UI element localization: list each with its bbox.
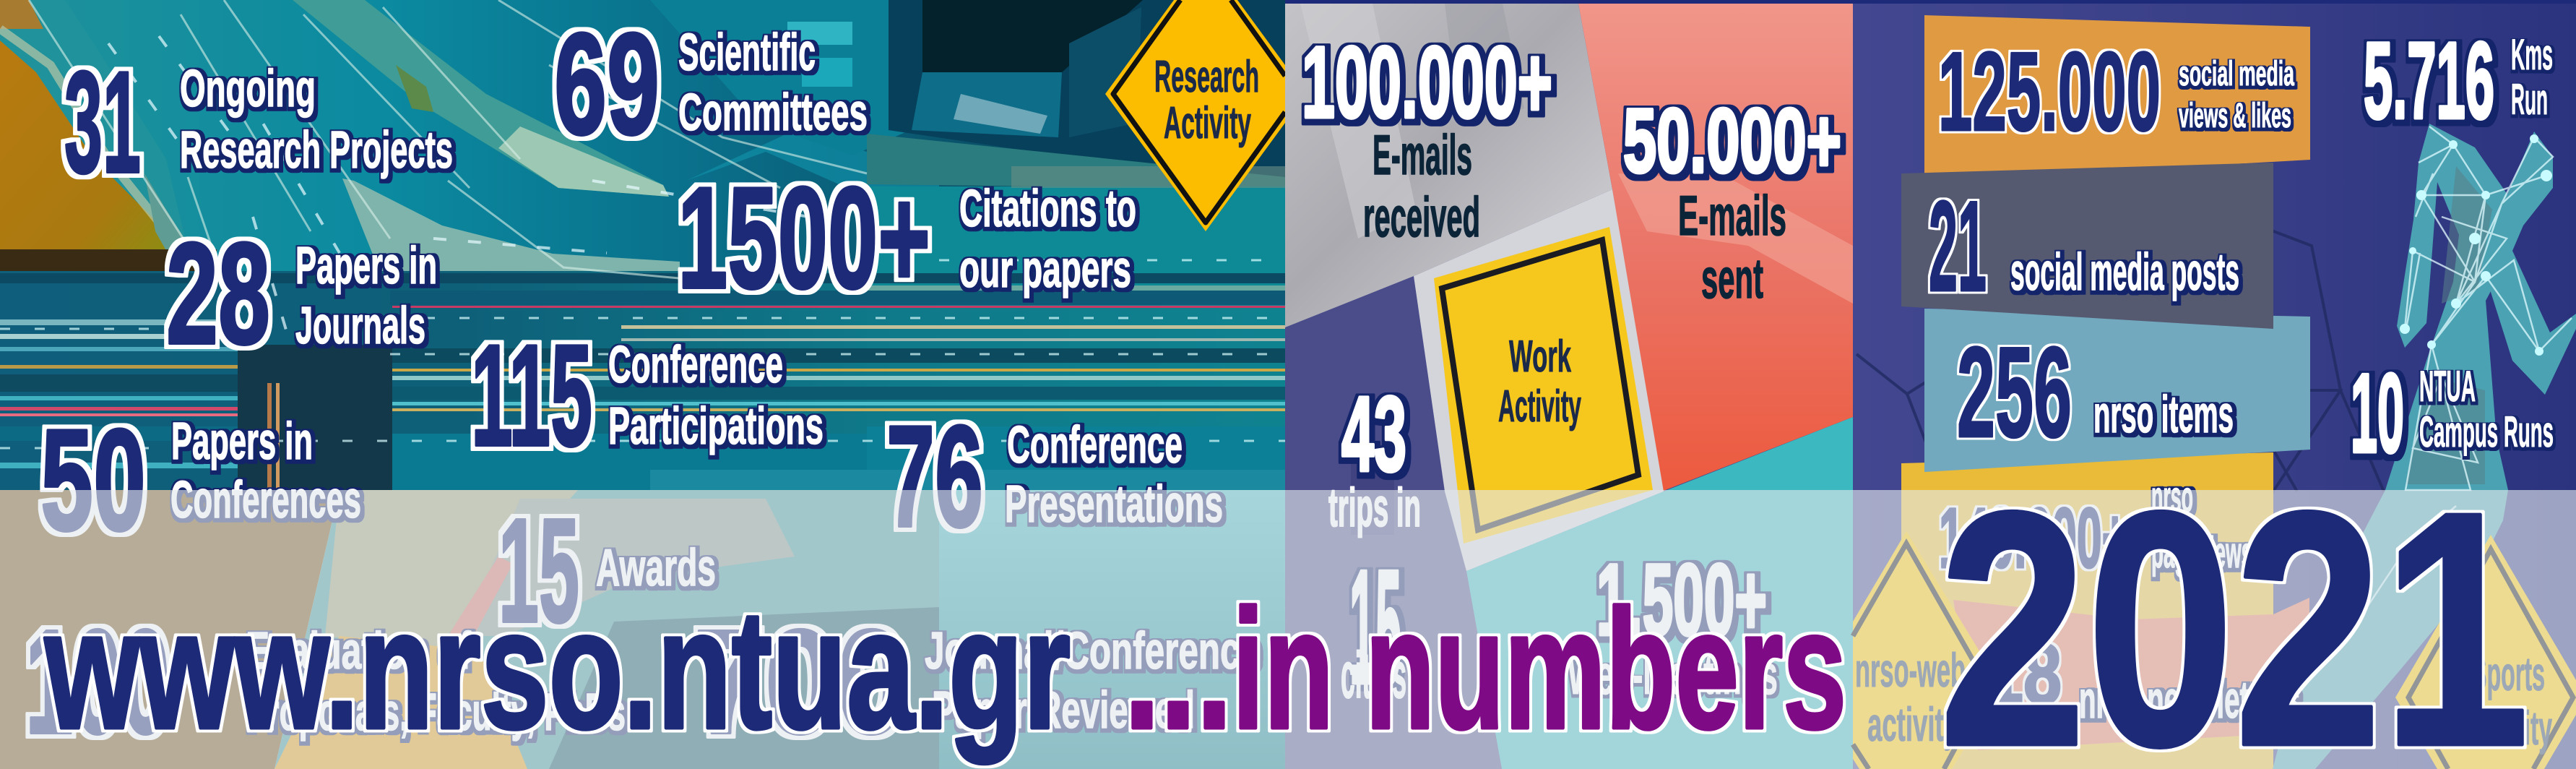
label: nrso newsletters — [2079, 671, 2300, 729]
block: blue nrso items — [1924, 309, 2310, 472]
site address: www.nrso.ntua.gr — [44, 574, 1071, 764]
stat: 10 NTUA campus runs — [2351, 351, 2554, 476]
stat: newsletters — [1985, 627, 2300, 729]
label line: Papers in — [295, 237, 437, 295]
label: Web-Meetings — [1568, 643, 1778, 706]
number 76: 76 — [886, 396, 983, 557]
top navy bar — [1285, 0, 2576, 4]
panel: work activity — [1285, 0, 1853, 769]
stat: 69 scientific committees — [554, 4, 868, 165]
number 100: 100 — [25, 599, 170, 765]
background collage: grey, red, purple and teal shards — [1285, 0, 1853, 769]
sign text: Work — [1509, 332, 1571, 382]
number: 100.000+ — [1302, 25, 1552, 139]
stat: 140.000+ pageviews: nrso — [2151, 473, 2193, 521]
number 69: 69 — [554, 4, 660, 165]
number: 50.000+ — [1623, 91, 1841, 192]
stat: 100.000+ emails received: E-mails — [1373, 123, 1472, 186]
number 115: 115 — [471, 315, 592, 476]
stat: 1.500+ web meetings — [1568, 543, 1778, 706]
number: 140.000+ — [1939, 491, 2128, 586]
block: grey social media posts: social media posts — [2010, 244, 2239, 301]
number 256: 256 — [1957, 320, 2072, 464]
label line: Proposals, Faculty, PhDs — [246, 684, 626, 742]
translucent title band — [0, 490, 2576, 769]
sign: nrso-web activity — [1853, 531, 2001, 769]
label line: our papers — [959, 241, 1131, 298]
block: grey social media posts: 21 — [1929, 174, 1987, 318]
stat: 10 NTUA campus runs: 10 — [2351, 351, 2404, 476]
stat: 31 ongoing research projects: 31 — [64, 42, 141, 203]
number 125.000: 125.000 — [1938, 29, 2161, 154]
label line: Presentations — [1005, 476, 1223, 533]
label line: Paper Reviewed — [932, 682, 1195, 739]
label line: Papers in — [171, 413, 313, 471]
stat: journal and conference peer reviews — [693, 599, 1260, 765]
block: pink newsletters — [1953, 598, 2309, 750]
label line: Conference — [1007, 416, 1183, 474]
stat: 76 conference presentations — [886, 396, 1223, 557]
number 43: 43 — [1341, 375, 1406, 494]
label line: Evaluation of — [246, 622, 472, 680]
stat: 28 papers in journals — [166, 213, 437, 374]
number 28: 28 — [166, 213, 270, 374]
number 50: 50 — [40, 400, 146, 561]
navy background with faint network — [1853, 0, 2576, 769]
sign text: activity — [1867, 697, 1958, 751]
label line: Committees — [678, 84, 868, 142]
panel: outreach and sports activity — [1285, 0, 2576, 769]
stat: 5.716 kms run — [2364, 20, 2553, 141]
label line: Journals — [295, 297, 425, 355]
block: grey social media posts — [1901, 163, 2273, 329]
photo background: aerial highway — [0, 0, 1286, 769]
tagline: in numbers — [1232, 574, 1846, 764]
stat: 140.000+ pageviews — [1939, 473, 2252, 586]
sign: sports activity — [2395, 535, 2576, 769]
stat: 115 conference participations — [471, 315, 824, 476]
panel: work activity: cities — [1341, 640, 1406, 712]
label line: sent — [1701, 246, 1763, 310]
label line: Ongoing — [180, 60, 316, 118]
label: Awards — [596, 539, 716, 597]
sign: research activity — [1105, 0, 1285, 231]
stat: 43 trips in 15 cities — [1328, 375, 1421, 718]
label line: Scientific — [678, 24, 816, 82]
block: yellow pageviews — [1901, 452, 2273, 769]
stat: 31 ongoing research projects — [64, 42, 453, 203]
panel: work activity: 15 — [1349, 536, 1401, 718]
number 700: 700 — [693, 599, 907, 765]
block: orange social media views — [1924, 15, 2310, 181]
sign: work activity — [1434, 227, 1653, 544]
stat: 1500+ citations — [678, 158, 1136, 319]
number: 18 — [1985, 627, 2062, 722]
sign text: Activity — [1164, 98, 1251, 148]
label: trips in — [1328, 477, 1421, 538]
stat: evaluation of proposals — [25, 599, 626, 765]
number 1500+: 1500+ — [678, 158, 930, 319]
label line: social media — [2179, 55, 2294, 93]
panel: outreach and sports activity: pageviews — [2151, 528, 2252, 577]
illustration: network runner — [2273, 124, 2576, 769]
stat: 50.000+ emails sent — [1623, 91, 1841, 310]
label line: Journal/Conference — [925, 622, 1260, 680]
stat: 15 awards: 15 — [498, 488, 579, 653]
label line: Conferences — [170, 471, 361, 529]
panel: research activity (night highway photo) — [0, 0, 1286, 769]
label: nrso items — [2093, 386, 2234, 444]
label line: Conference — [608, 336, 783, 394]
stat: 10 NTUA campus runs: NTUA — [2419, 362, 2476, 411]
label line: E-mails — [1678, 184, 1786, 247]
sign text: Activity — [1498, 382, 1581, 431]
sign text: Research — [1154, 52, 1259, 102]
label line: Research Projects — [180, 121, 453, 179]
label line: received — [1363, 185, 1480, 249]
label line: Citations to — [959, 180, 1136, 238]
sign text: nrso-web — [1855, 643, 1966, 697]
stat: 100.000+ emails received — [1302, 25, 1552, 249]
stat: 50 papers in conferences — [40, 400, 361, 561]
title: www.nrso.ntua.gr ...in numbers 2021 — [44, 442, 2530, 769]
label line: views & likes — [2179, 97, 2291, 135]
label line: Participations — [608, 398, 824, 455]
number: 1.500+ — [1596, 543, 1767, 656]
ellipsis: ... — [1124, 574, 1232, 764]
